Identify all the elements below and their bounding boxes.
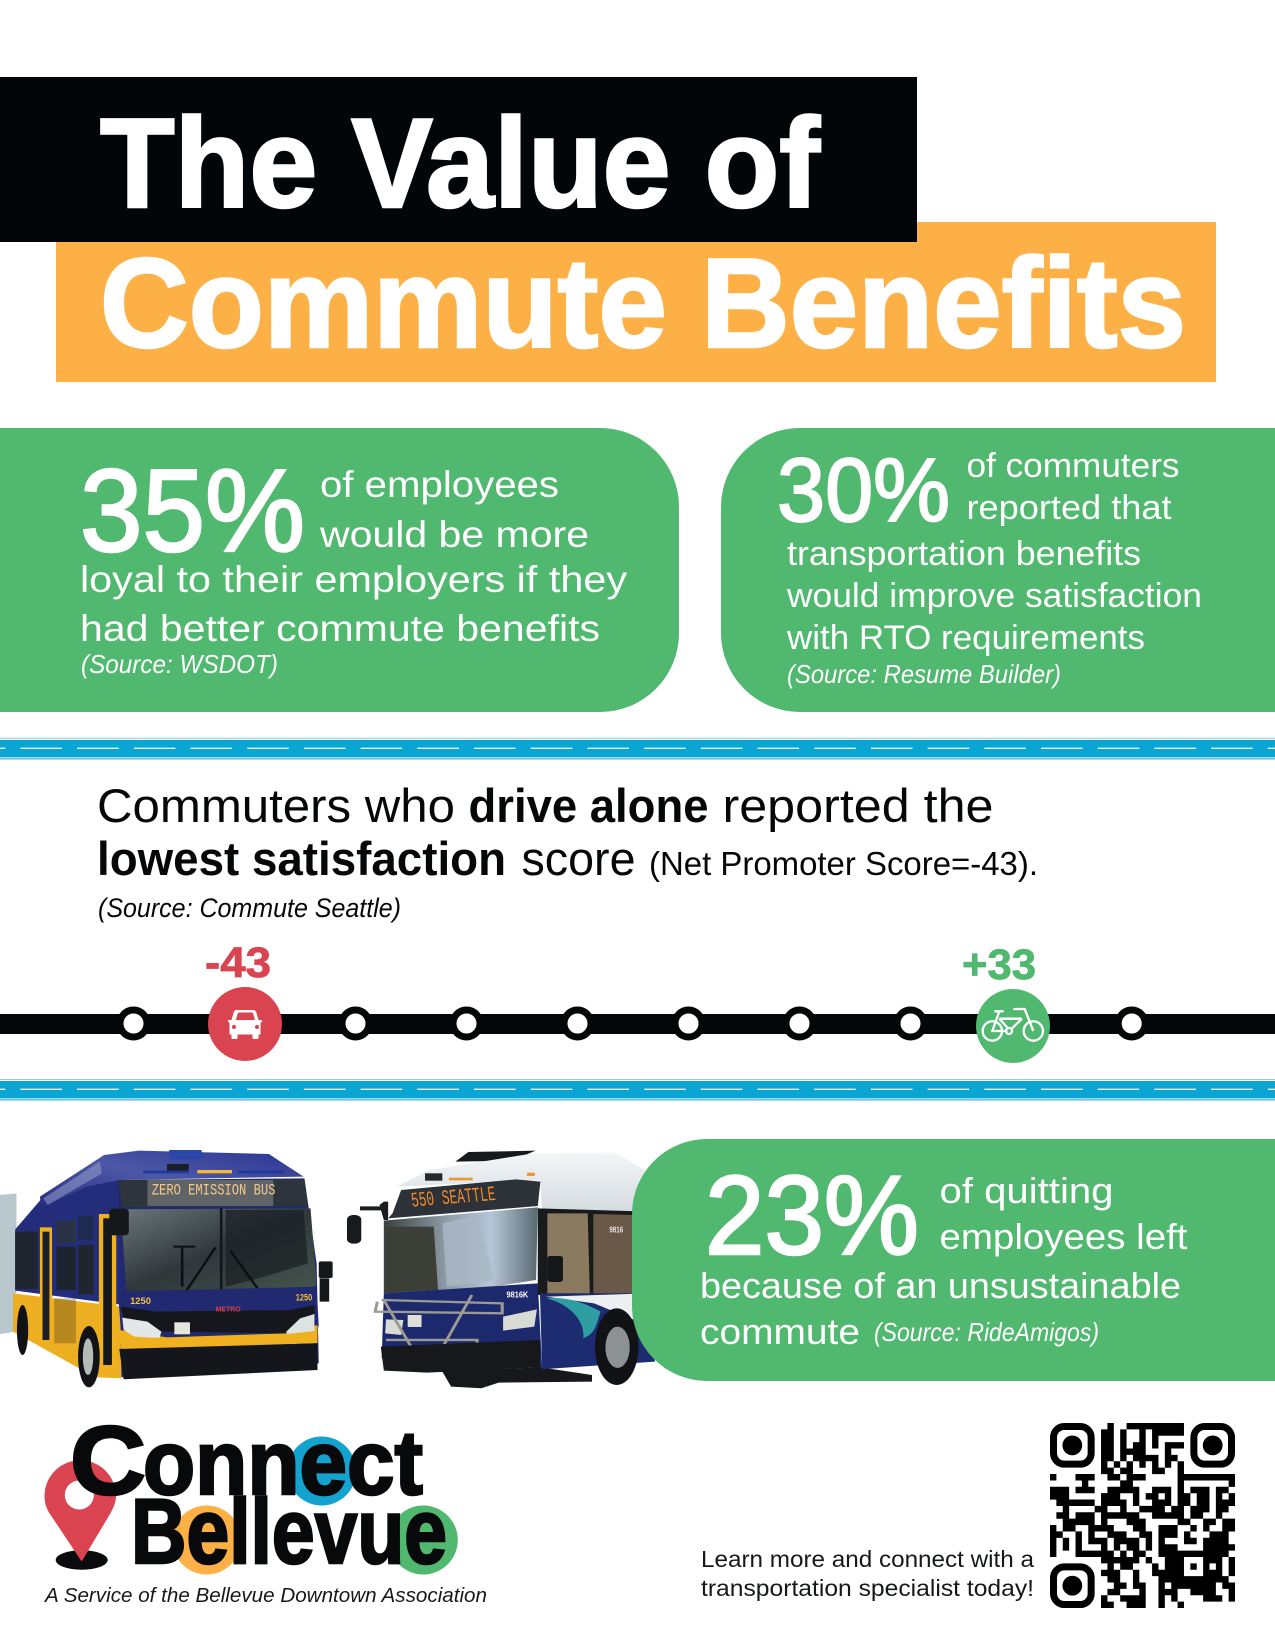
illustration: King County Metro bus: 1250	[130, 1296, 151, 1307]
illustration: King County Metro bus	[0, 1150, 333, 1387]
panel background	[0, 428, 679, 712]
icon: bicycle marker	[976, 989, 1050, 1063]
stat text: of commuters	[966, 447, 1180, 485]
stat text: reported that	[966, 489, 1172, 527]
satisfaction heading: (Source: Commute Seattle)	[98, 893, 401, 923]
logo: Connect Bellevue	[44, 1406, 487, 1607]
wordmark: Connect: onnect	[143, 1413, 423, 1514]
satisfaction heading: (Net Promoter Score=-43).	[649, 845, 1038, 882]
road divider: bottom	[0, 1079, 1275, 1100]
source: (Source: Resume Builder)	[787, 659, 1061, 689]
title line 2: Commute Benefits	[100, 232, 1186, 374]
title	[0, 77, 1216, 382]
satisfaction scale line	[0, 939, 1275, 1063]
stat text: had better commute benefits	[80, 608, 600, 649]
data modules	[1050, 1426, 1235, 1605]
source: (Source: WSDOT)	[81, 649, 278, 679]
finder patterns	[1054, 1427, 1232, 1605]
stat text: of quitting	[940, 1170, 1114, 1211]
illustration: King County Metro bus: METRO	[216, 1304, 241, 1313]
stat text	[80, 464, 628, 649]
satisfaction heading: score	[522, 832, 636, 885]
stat text: commute	[700, 1311, 860, 1352]
panel: 35% stat	[0, 428, 679, 712]
panel background	[721, 428, 1275, 712]
illustration: Sound Transit bus: 9816K	[507, 1291, 528, 1299]
wordmark: Bellevue: Bellevue	[131, 1481, 447, 1583]
title bar: black	[0, 77, 917, 242]
satisfaction heading	[97, 779, 1038, 923]
title line 1: The Value of	[100, 92, 821, 234]
stat text: loyal to their employers if they	[80, 559, 628, 600]
satisfaction heading: drive alone	[468, 779, 708, 832]
stat text: with RTO requirements	[786, 619, 1145, 657]
colored rings	[287, 1436, 356, 1506]
QR code	[1050, 1426, 1235, 1605]
call to action	[701, 1546, 1034, 1601]
score label +33: +33	[962, 941, 1036, 989]
wordmark: Connect: C	[70, 1406, 146, 1515]
tagline: A Service of the Bellevue Downtown Association	[44, 1585, 487, 1607]
panel: 30% stat	[721, 428, 1275, 712]
source: (Source: RideAmigos)	[874, 1317, 1099, 1347]
icon: car marker	[208, 987, 282, 1061]
stat text: employees left	[940, 1216, 1188, 1257]
satisfaction heading: Commuters who	[97, 779, 455, 832]
stat text: would improve satisfaction	[786, 577, 1202, 615]
illustration: Sound Transit bus	[347, 1151, 655, 1388]
score label -43: -43	[205, 939, 271, 987]
stat text: of employees	[320, 464, 559, 505]
big number 35%: 35%	[80, 445, 305, 576]
stat text: transportation benefits	[787, 535, 1141, 573]
big number 23%: 23%	[705, 1153, 919, 1278]
title bar: orange	[56, 222, 1216, 382]
illustration: Sound Transit bus: 550 SEATTLE	[410, 1184, 497, 1214]
satisfaction heading: lowest satisfaction	[97, 832, 506, 885]
scale stops	[120, 1010, 1145, 1037]
stat text	[700, 1170, 1188, 1352]
panel background	[632, 1139, 1275, 1381]
stat text: would be more	[319, 514, 589, 555]
satisfaction heading: reported the	[722, 779, 994, 832]
map pin	[44, 1460, 116, 1570]
call to action: transportation specialist today!	[701, 1575, 1034, 1601]
road divider: top	[0, 738, 1275, 759]
big number 30%: 30%	[777, 441, 950, 541]
panel: 23% stat	[632, 1139, 1275, 1381]
illustration: King County Metro bus: 1250	[296, 1293, 312, 1303]
stat text: because of an unsustainable	[700, 1265, 1181, 1306]
illustration: King County Metro bus: ZERO EMISSION BUS	[152, 1182, 275, 1199]
illustration: Sound Transit bus: 9816	[609, 1226, 623, 1235]
call to action: Learn more and connect with a	[701, 1546, 1034, 1572]
stat text	[786, 447, 1202, 657]
